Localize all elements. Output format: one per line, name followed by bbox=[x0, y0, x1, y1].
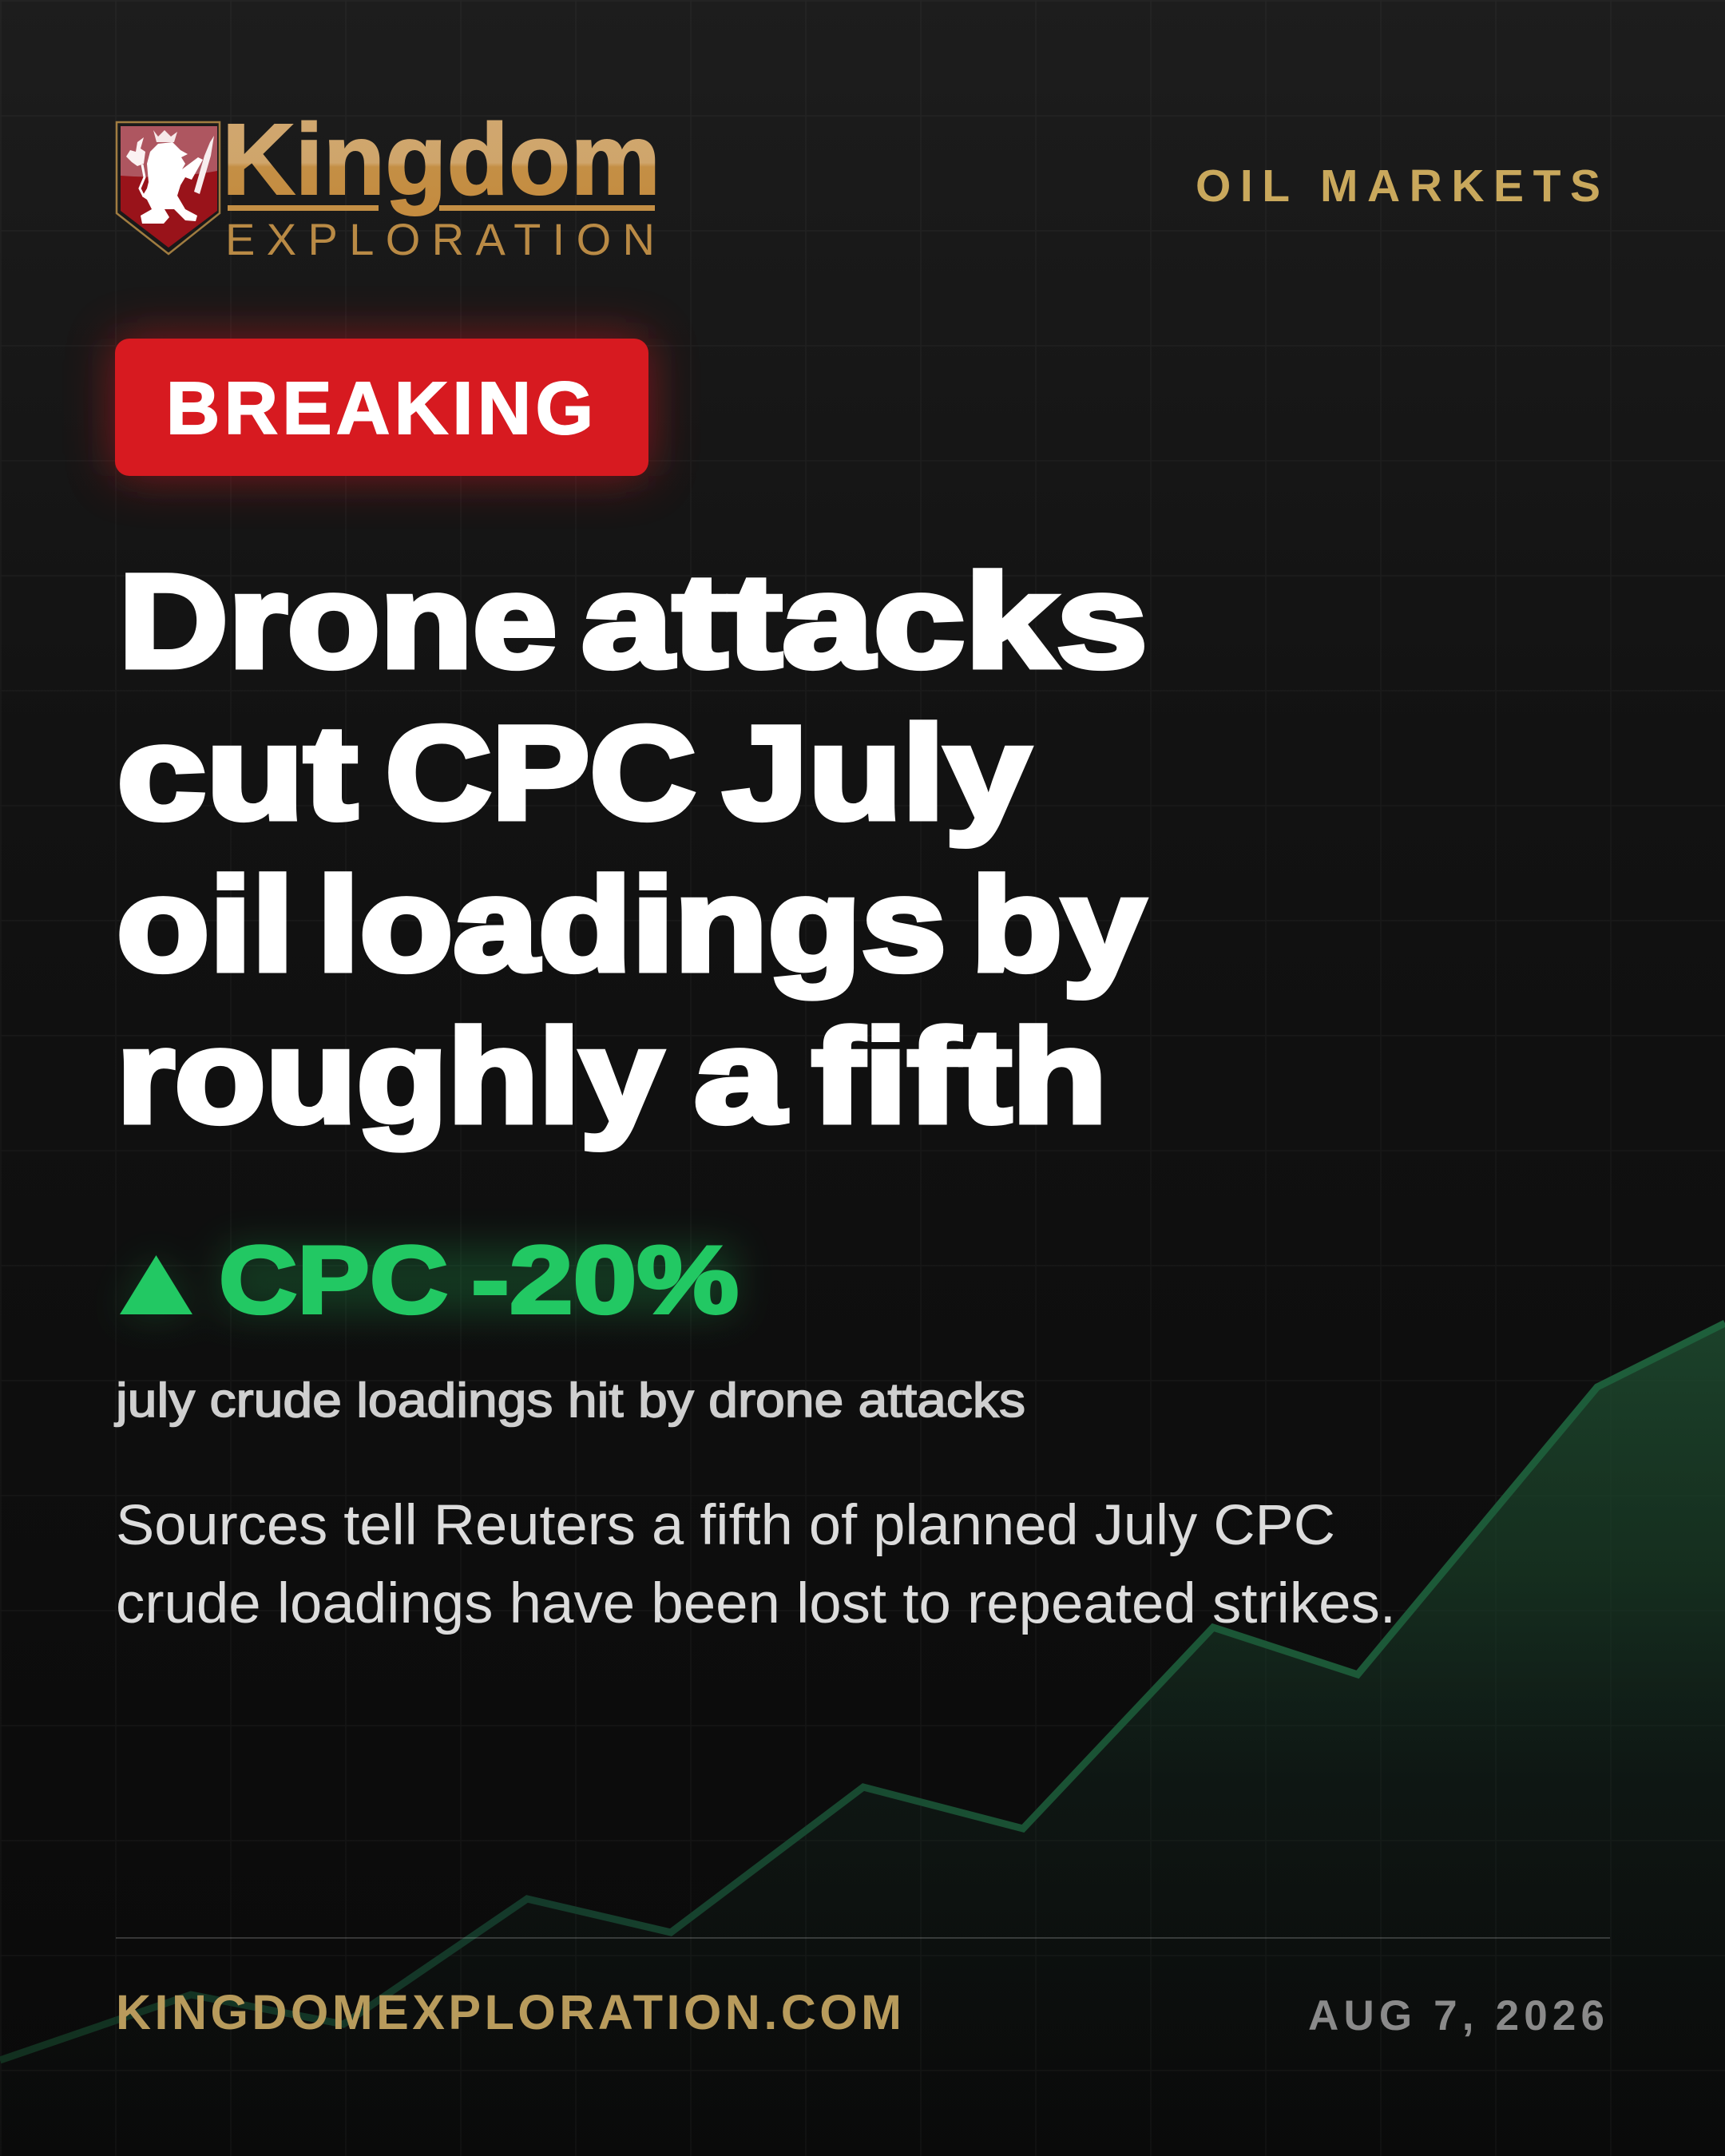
metric: CPC -20% with triangle: -20% bbox=[471, 1227, 739, 1334]
badge: breaking bbox=[115, 339, 648, 476]
body text: Sources tell Reuters a fifth of planned July CPC bbox=[116, 1494, 1335, 1557]
wordmark rule bbox=[228, 205, 655, 211]
headline: fifth bbox=[811, 1003, 1107, 1151]
headline: roughly bbox=[117, 1003, 663, 1151]
headline: cut bbox=[117, 700, 358, 847]
headline: July bbox=[723, 700, 1030, 847]
wordmark: EXPLORATION: EXPLORATION bbox=[225, 214, 655, 264]
subheading: july crude loadings hit by drone attacks bbox=[114, 1373, 1025, 1427]
headline: attacks bbox=[581, 548, 1148, 696]
metric: CPC -20% with triangle bbox=[120, 1227, 739, 1334]
chart: rising green area line bbox=[0, 1323, 1725, 2156]
body text: crude loadings have been lost to repeated strikes. bbox=[116, 1572, 1396, 1635]
logo: Kingdom Exploration bbox=[115, 120, 655, 256]
footer divider bbox=[116, 1937, 1610, 1939]
headline: CPC bbox=[385, 700, 696, 847]
footer: website: KINGDOMEXPLORATION.COM bbox=[116, 1985, 902, 2039]
wordmark: Kingdom: Kingdom bbox=[222, 103, 660, 216]
metric: CPC -20% with triangle: CPC bbox=[219, 1227, 448, 1334]
headline bbox=[117, 548, 1148, 1151]
badge: breaking: BREAKING bbox=[166, 367, 593, 450]
headline: by bbox=[971, 851, 1145, 999]
headline: Drone bbox=[118, 548, 557, 696]
headline: oil bbox=[117, 851, 294, 999]
icon: lion shield bbox=[117, 122, 220, 254]
icon: up triangle bbox=[120, 1255, 192, 1314]
footer: date: AUG 7, 2026 bbox=[1308, 1992, 1604, 2039]
body text bbox=[116, 1494, 1396, 1635]
headline: a bbox=[694, 1003, 787, 1151]
category label: oil markets: OIL MARKETS bbox=[1196, 161, 1600, 212]
headline: loadings bbox=[317, 851, 946, 999]
